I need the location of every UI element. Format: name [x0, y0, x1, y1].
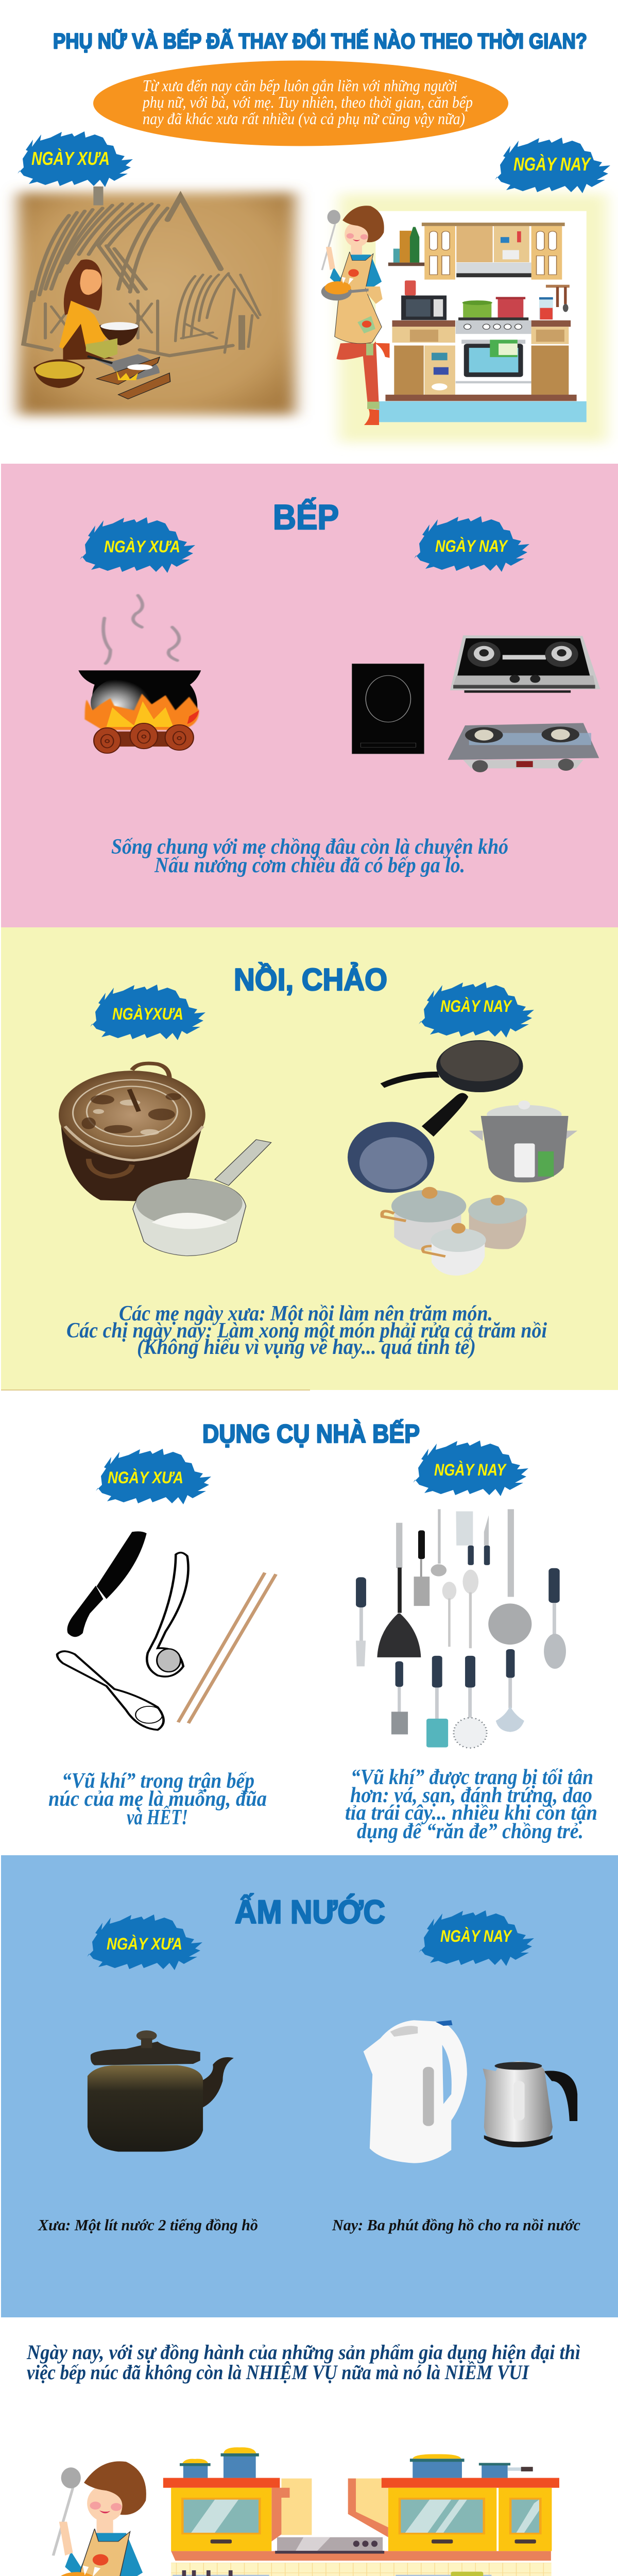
caption: bếp	[111, 835, 508, 877]
badge: ngày xưa	[96, 1449, 211, 1504]
caption: nồi, chảo: Các mẹ ngày xưa: Một nồi làm nên trăm món.	[119, 1302, 493, 1326]
caption: bếp: Nấu nướng cơm chiều đã có bếp ga lo.	[154, 854, 465, 877]
caption: modern utensils: “Vũ khí” được trang bị tối tân	[351, 1766, 593, 1789]
text block: joy of cooking	[26, 2341, 580, 2384]
illustration: old rusty pot and saucepan	[59, 1063, 271, 1256]
caption: nồi, chảo: Các chị ngày nay: Làm xong một món phải rửa cả trăm nồi	[66, 1319, 547, 1343]
pots on shelf	[180, 2447, 533, 2478]
badge: ngày nay: NGÀY NAY	[440, 1927, 512, 1945]
illustration: modern kitchen, woman	[321, 194, 607, 443]
callout: orange ellipse intro: phụ nữ, với bà, với mẹ. Tuy nhiên, theo thời gian, căn bếp	[142, 93, 473, 111]
caption: old kettle: Xưa: Một lít nước 2 tiếng đồng hồ	[38, 2216, 258, 2234]
badge: ngày nay: NGÀY NAY	[434, 1461, 507, 1479]
illustration: modern pans, rice cooker, pot set	[348, 1040, 577, 1276]
backsplash with tools	[168, 2563, 552, 2576]
badge: ngày nay: NGÀY NAY	[440, 997, 512, 1015]
panel: dụng cụ nhà bếp	[1, 1389, 597, 1843]
panel: ấm nước	[1, 1855, 618, 2317]
badge: ngày xưa	[18, 131, 133, 187]
badge: ngày xưa	[87, 1914, 202, 1970]
caption: nồi, chảo: (Không hiểu vì vụng về hay... quá tinh tế)	[137, 1335, 476, 1359]
caption: old utensils	[48, 1769, 267, 1829]
badge: ngày nay	[413, 1440, 528, 1496]
kitchen upper cabinets	[163, 2478, 559, 2561]
badge: ngày nay	[414, 516, 529, 572]
badge: ngày xưa: NGÀY XƯA	[104, 537, 180, 556]
badge: ngày xưa	[80, 517, 195, 573]
heading: nồi, chảo: NỒI, CHẢO	[234, 962, 387, 997]
caption: old utensils: núc của mẹ là muỗng, đũa	[48, 1787, 267, 1811]
text block: joy of cooking: việc bếp núc đã không còn là NHIỆM VỤ nữa mà nó là NIỀM VUI	[27, 2361, 529, 2384]
illustration: modern utensils	[356, 1509, 566, 1748]
callout: orange ellipse intro	[93, 61, 508, 146]
callout: orange ellipse intro: Từ xưa đến nay căn bếp luôn gắn liền với những người	[143, 76, 457, 95]
illustration: gas stoves	[448, 635, 600, 772]
illustration: pot over wood fire	[78, 596, 201, 753]
icon: woman with chicken pan	[52, 2461, 154, 2576]
badge: ngày xưa: NGÀYXƯA	[112, 1005, 183, 1023]
heading: bếp: BẾP	[273, 497, 339, 537]
caption: bếp: Sống chung với mẹ chồng đâu còn là chuyện khó	[111, 835, 508, 859]
caption: old utensils: và HẾT!	[127, 1805, 188, 1829]
panel: nồi, chảo	[1, 927, 618, 1390]
heading: dụng cụ nhà bếp: DỤNG CỤ NHÀ BẾP	[202, 1419, 420, 1448]
illustration: old kitchen, woman by fire	[18, 187, 296, 415]
range hood	[275, 2537, 384, 2554]
badge: ngày nay	[419, 982, 534, 1038]
illustration: modern electric kettles	[364, 2020, 577, 2163]
caption: modern kettle: Nay: Ba phút đồng hồ cho ra nồi nước	[332, 2216, 580, 2234]
illustration: woman in yellow kitchen	[52, 2447, 560, 2576]
illustration: old kettle	[88, 2030, 234, 2151]
caption: old utensils: “Vũ khí” trong trận bếp	[62, 1769, 254, 1793]
badge: ngày xưa: NGÀY XƯA	[31, 148, 110, 169]
text block: joy of cooking: Ngày nay, với sự đồng hành của những sản phẩm gia dụng hiện đại thì	[26, 2341, 580, 2364]
illustration: knife, ladle, spoon, chopsticks	[57, 1531, 276, 1730]
section: intro	[18, 28, 610, 443]
badge: ngày xưa: NGÀY XƯA	[107, 1935, 182, 1953]
heading: ấm nước: ẤM NƯỚC	[235, 1893, 385, 1930]
caption: modern utensils: tỉa trái cây... nhiều khi còn tận	[345, 1801, 597, 1825]
illustration: induction hob	[352, 664, 424, 754]
badge: ngày nay: NGÀY NAY	[513, 154, 591, 175]
caption: modern utensils: dụng để “răn đe” chồng trẻ.	[357, 1820, 583, 1843]
caption: modern utensils: hơn: vá, sạn, đánh trứng, dao	[350, 1784, 592, 1807]
badge: ngày xưa	[90, 985, 205, 1040]
panel: bếp	[1, 464, 618, 927]
badge: ngày nay: NGÀY NAY	[435, 537, 508, 555]
badge: ngày nay	[419, 1910, 534, 1966]
badge: ngày nay	[495, 138, 610, 193]
caption: nồi, chảo	[66, 1302, 547, 1359]
badge: ngày xưa: NGÀY XƯA	[108, 1468, 183, 1487]
callout: orange ellipse intro: nay đã khác xưa rất nhiều (và cả phụ nữ cũng vậy nữa)	[143, 109, 465, 128]
caption: modern utensils	[345, 1766, 597, 1843]
